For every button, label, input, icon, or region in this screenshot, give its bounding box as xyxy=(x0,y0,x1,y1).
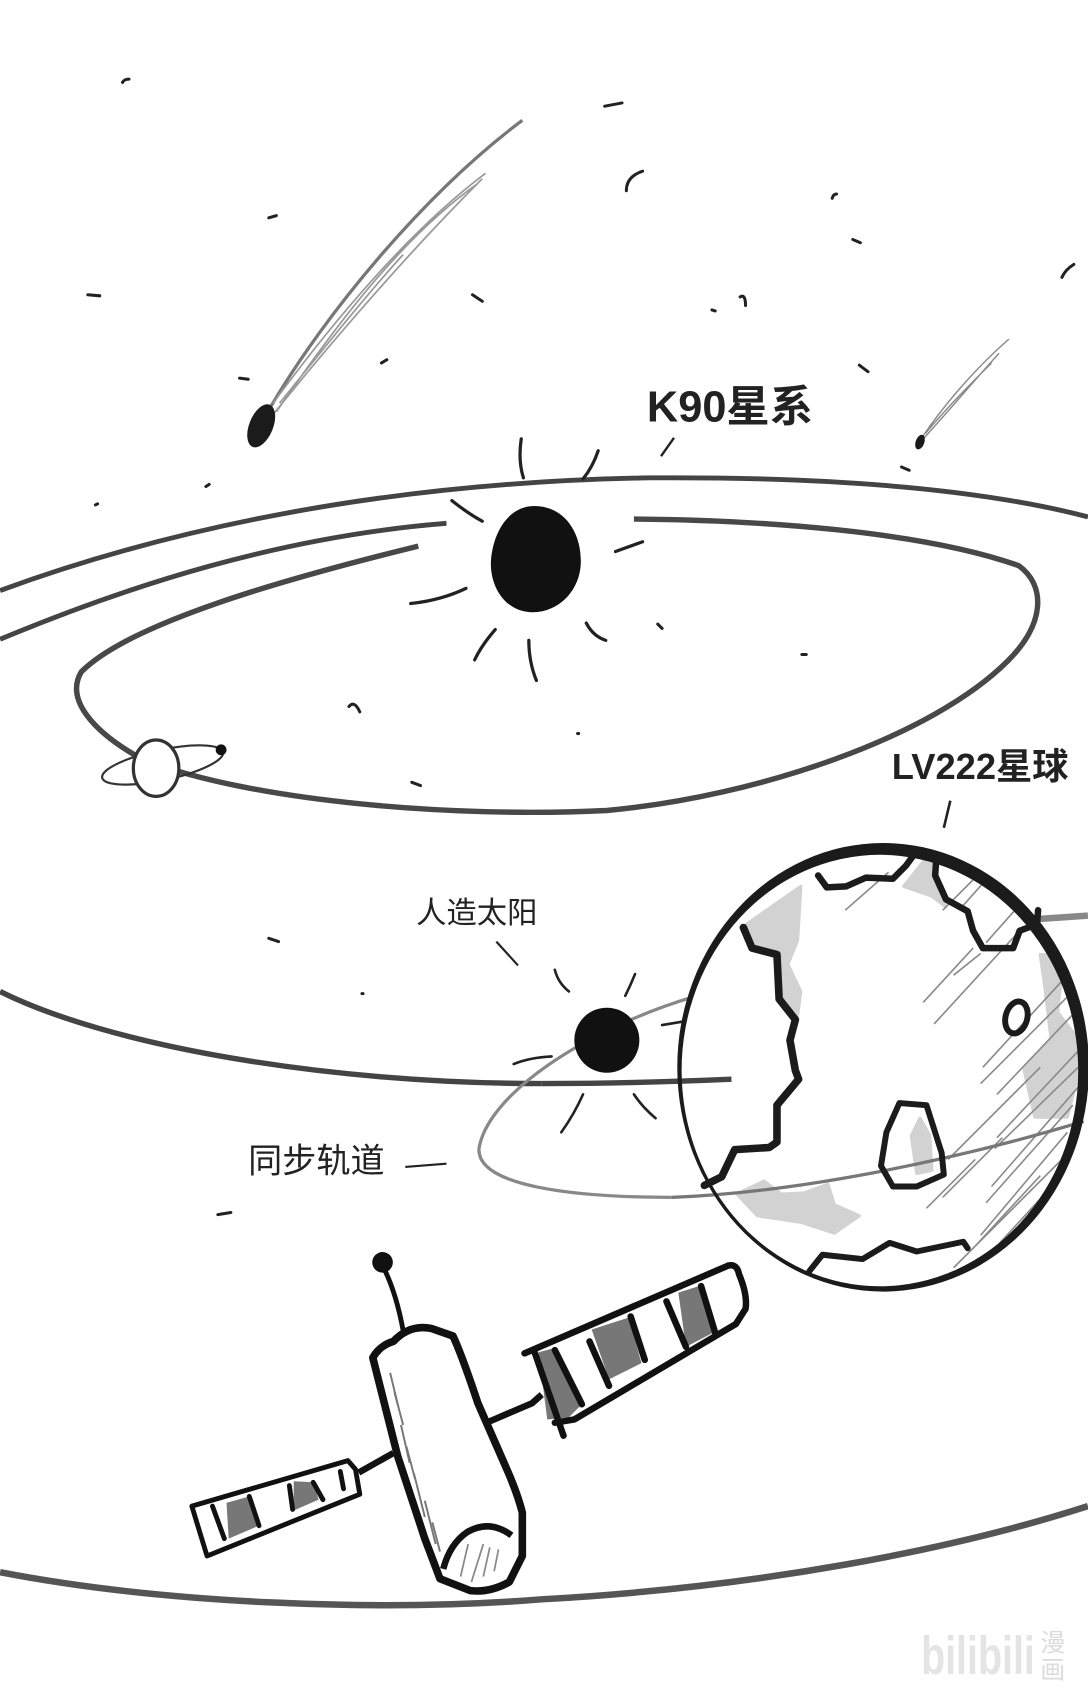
connector arms xyxy=(359,1395,542,1473)
satellite body xyxy=(373,1328,522,1591)
label: synchronous orbit: 同步轨道 xyxy=(248,1142,385,1180)
small comet xyxy=(913,339,1009,451)
label: artificial sun: 人造太阳 xyxy=(416,896,537,930)
grey terrain patches xyxy=(737,860,1085,1233)
bottom orbit xyxy=(0,1506,1088,1605)
label: K90 galaxy xyxy=(647,383,813,456)
synchronous orbit xyxy=(479,997,694,1197)
planet outline xyxy=(677,843,1088,1292)
inner orbit with planet xyxy=(77,519,1038,812)
artificial sun with rays xyxy=(514,970,688,1132)
watermark: 画 xyxy=(1040,1656,1065,1684)
label: LV222 planet xyxy=(892,746,1069,828)
left solar panel xyxy=(192,1461,360,1556)
watermark: bilibili xyxy=(921,1626,1035,1686)
central star with rays xyxy=(411,439,643,680)
small ringed planet xyxy=(99,737,227,796)
planet disc xyxy=(678,844,1088,1291)
watermark: 漫 xyxy=(1040,1629,1065,1657)
large comet xyxy=(242,120,522,451)
second orbit left arc xyxy=(0,523,446,639)
hatching xyxy=(845,861,1081,1284)
planet LV222 xyxy=(542,843,1088,1292)
lower orbit visible inside planet xyxy=(542,1079,731,1084)
antenna xyxy=(372,1252,403,1331)
satellite xyxy=(192,1252,747,1591)
synchronous orbit passing through xyxy=(672,1121,1084,1197)
orbit stub right of planet xyxy=(1040,916,1088,919)
outer orbit xyxy=(0,478,1088,591)
scattered space debris xyxy=(88,79,1074,1215)
coastlines xyxy=(704,854,1038,1271)
label: K90 galaxy: K90星系 xyxy=(647,383,813,431)
right solar panel xyxy=(524,1265,747,1436)
label: synchronous orbit xyxy=(248,1142,446,1180)
label: LV222 planet: LV222星球 xyxy=(892,746,1069,787)
label: artificial sun xyxy=(416,896,537,965)
lower large orbit xyxy=(0,991,542,1084)
